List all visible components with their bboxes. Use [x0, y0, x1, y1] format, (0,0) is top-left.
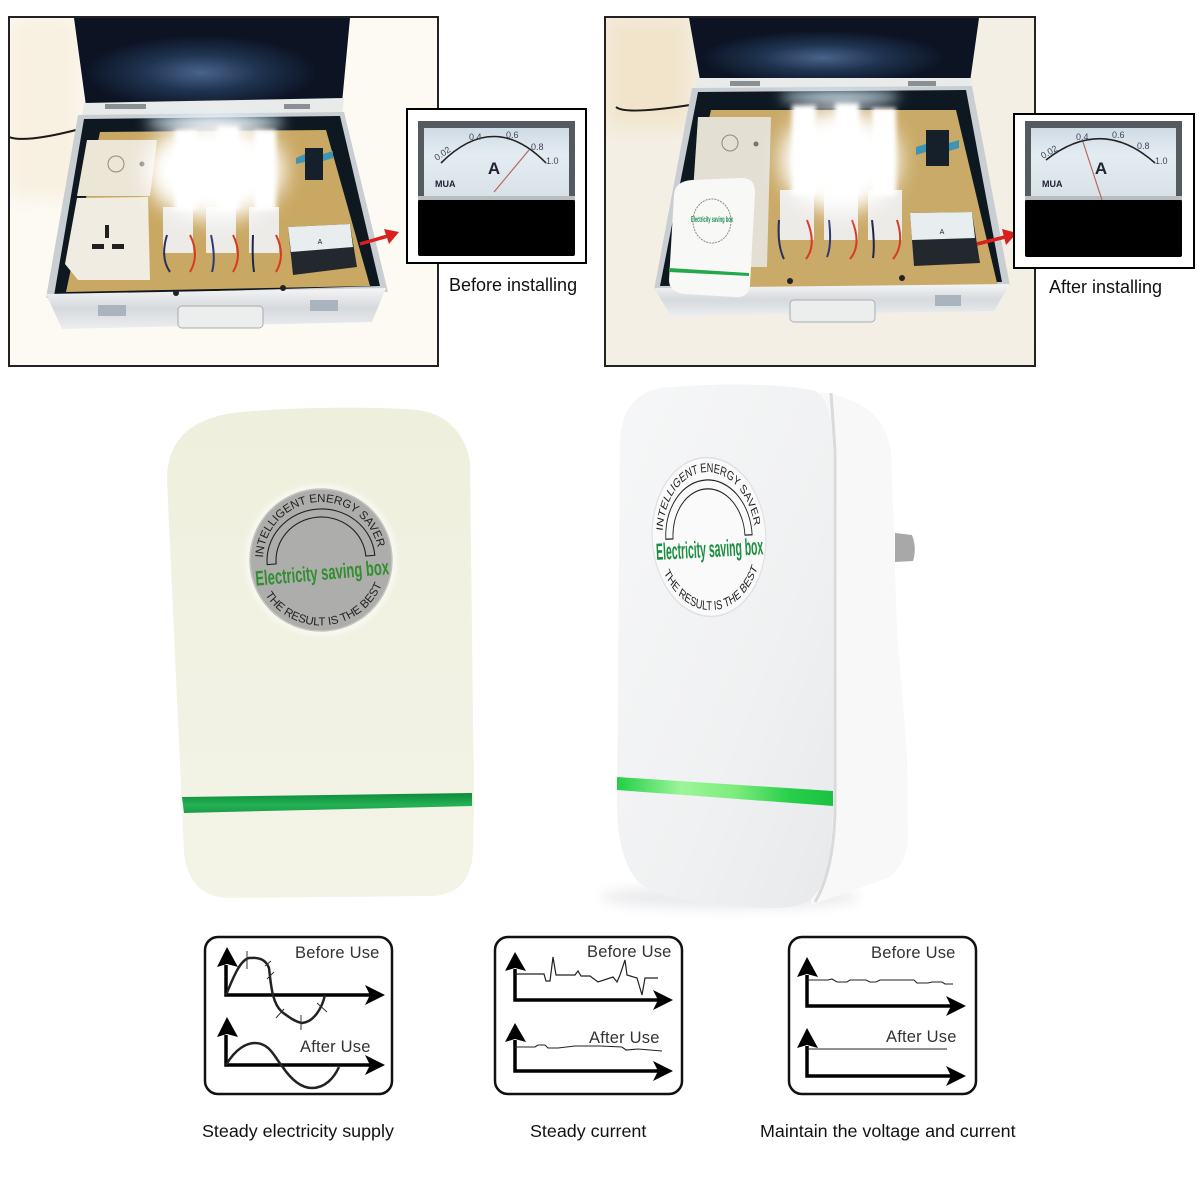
- chart: steady current: After Use: [589, 1029, 660, 1047]
- panel: after installing photo: A: [940, 229, 945, 236]
- panel: after meter inset: 1.0: [1155, 156, 1168, 166]
- panel: before meter inset: MUA: [435, 179, 456, 189]
- panel: after installing photo: [605, 17, 1035, 366]
- caption: maintain the voltage and current: Maintain the voltage and current: [760, 1121, 1016, 1141]
- badge: white label: [652, 456, 766, 618]
- frame: after photo border: [605, 17, 1035, 366]
- panel: before meter inset: 0.8: [531, 142, 544, 152]
- panel: before meter inset: [407, 109, 586, 263]
- arrow: after meter pointer: [977, 229, 1017, 245]
- caption: after installing: After installing: [1049, 277, 1162, 297]
- chart: steady electricity supply: Before Use: [295, 944, 380, 962]
- panel: after meter inset: 0.6: [1112, 130, 1125, 140]
- chart: steady current: Before Use: [587, 943, 672, 961]
- panel: before meter inset: 0.4: [469, 132, 482, 142]
- panel: before meter inset: 1.0: [546, 156, 559, 166]
- panel: before meter inset: 0.6: [506, 130, 519, 140]
- caption: before installing: Before installing: [449, 275, 577, 295]
- device: cream energy saver, front view: [167, 408, 474, 898]
- frame: before photo border: [9, 17, 438, 366]
- plug pin: [895, 533, 915, 562]
- chart: maintain the voltage and current: [789, 937, 976, 1094]
- panel: after meter inset: MUA: [1042, 179, 1063, 189]
- arrow: before meter pointer: [360, 229, 399, 244]
- indicator: green light bar: [617, 777, 833, 806]
- chart: steady electricity supply: After Use: [300, 1038, 371, 1056]
- badge: white label: Electricity saving box: [656, 535, 764, 566]
- panel: before installing photo: [9, 17, 438, 366]
- badge: white label: THE RESULT IS THE BEST: [665, 564, 756, 610]
- caption: steady electricity supply: Steady electricity supply: [202, 1121, 394, 1141]
- badge: silver label: [249, 488, 393, 632]
- panel: before meter inset: 0.02: [432, 144, 453, 163]
- panel: before installing photo: A: [318, 239, 323, 246]
- panel: after meter inset: 0.4: [1076, 132, 1089, 142]
- panel: after meter inset: [1014, 114, 1194, 268]
- panel: after installing photo: Electricity saving box: [691, 214, 733, 224]
- badge: white label: INTELLIGENT ENERGY SAVER: [656, 463, 760, 530]
- chart: steady electricity supply: [205, 937, 392, 1094]
- caption: steady current: Steady current: [530, 1121, 646, 1141]
- panel: after meter inset: A: [1095, 159, 1107, 178]
- badge: silver label: Electricity saving box: [254, 556, 390, 591]
- panel: after meter inset: 0.02: [1039, 143, 1059, 161]
- chart: maintain the voltage and current: After Use: [886, 1028, 957, 1046]
- device: white energy saver, angled view: [606, 384, 915, 910]
- panel: after meter inset: 0.8: [1137, 141, 1150, 151]
- badge: silver label: THE RESULT IS THE BEST: [266, 582, 381, 626]
- badge: silver label: INTELLIGENT ENERGY SAVER: [255, 494, 385, 557]
- chart: maintain the voltage and current: Before Use: [871, 944, 956, 962]
- chart: steady current: [495, 937, 682, 1094]
- panel: before meter inset: A: [488, 159, 500, 178]
